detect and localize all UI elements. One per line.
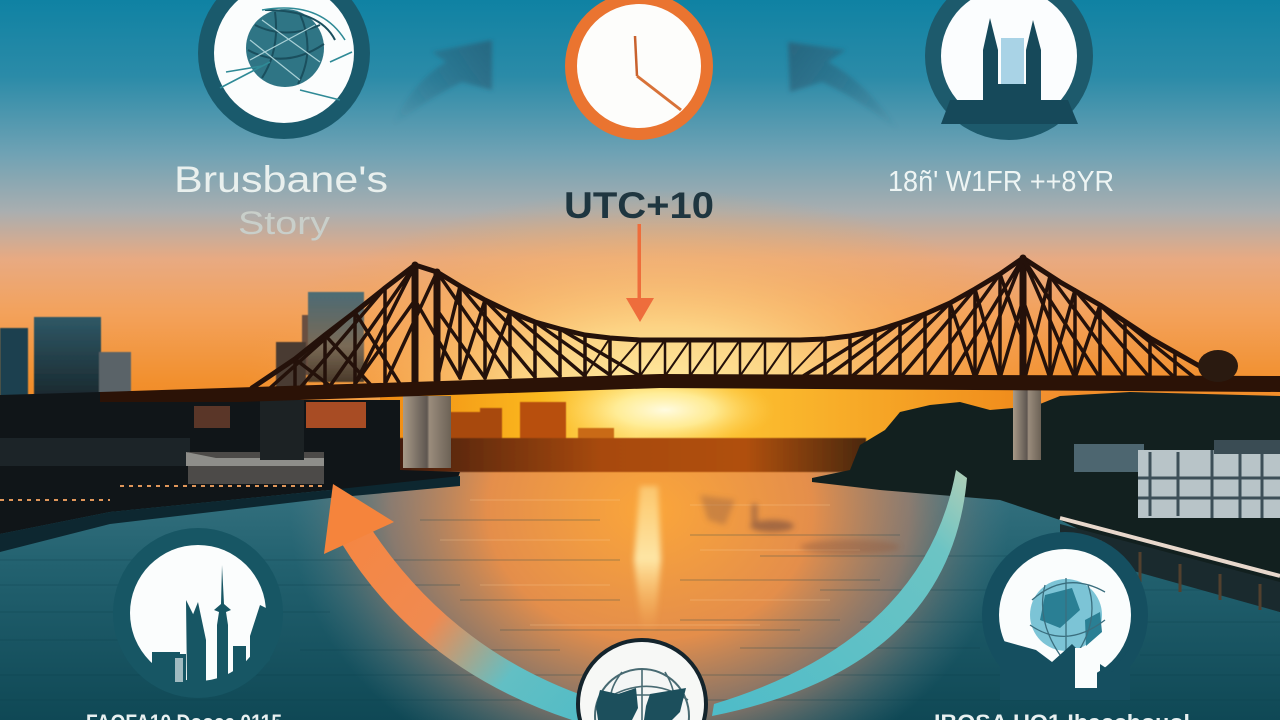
icon: clock badge top center — [571, 0, 707, 134]
faded curved arrow top right — [788, 42, 900, 132]
label: UTC+10: UTC+10 — [564, 185, 714, 226]
sun reflection on water — [634, 486, 661, 632]
arrow: UTC pointing down to the bridge — [626, 224, 654, 322]
river — [0, 465, 1280, 720]
icon: skyline badge bottom left — [113, 528, 283, 698]
bridge deck — [100, 374, 1280, 402]
heading: Brusbane's Story: Brusbane's — [174, 159, 388, 200]
icon: globe badge bottom right — [982, 532, 1148, 700]
heading: Brusbane's Story: Story — [238, 205, 330, 241]
dark tree at the end of bridge — [1198, 350, 1238, 382]
icon: towers badge top right — [925, 0, 1093, 140]
sunset sky background — [0, 0, 1280, 480]
background city skyline left — [0, 292, 364, 398]
icon: globe badge bottom center — [578, 640, 706, 720]
horizon glow below bridge — [380, 372, 1020, 448]
heading: Brusbane's Story — [174, 159, 388, 241]
icon: globe badge top left — [198, 0, 370, 139]
faded curved arrow top left — [392, 40, 492, 126]
curved teal arrow band right — [712, 470, 967, 716]
bridge truss — [252, 258, 1210, 388]
label: garbled caption top right: 18ñ' W1FR ++8YR — [888, 166, 1114, 198]
boats on river — [700, 495, 900, 554]
left shore and waterfront — [0, 392, 460, 552]
bridge piers — [403, 390, 1041, 468]
curved orange to teal arrow left — [324, 484, 590, 720]
distant city silhouette at horizon — [386, 402, 866, 472]
right shore with trees and white buildings — [812, 392, 1280, 612]
bridge: Story Bridge silhouette — [100, 258, 1280, 468]
